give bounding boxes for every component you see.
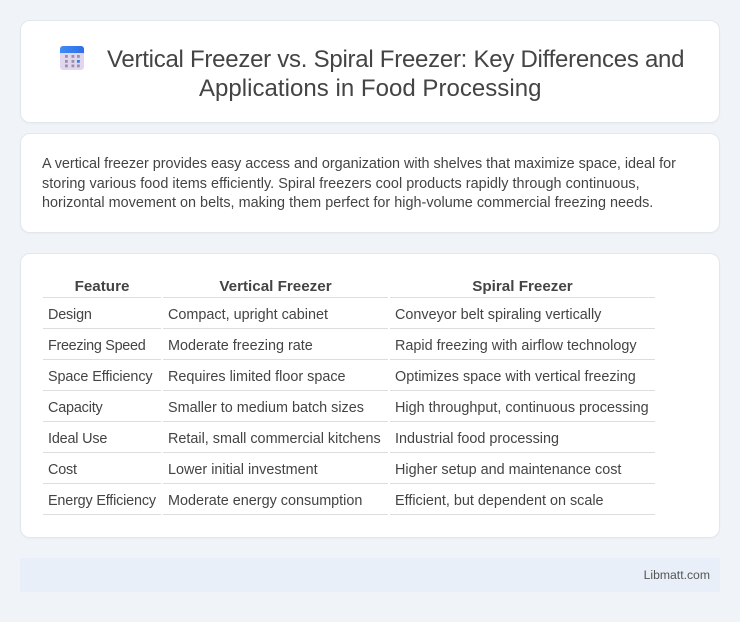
text: intro paragraph: A vertical freezer provides easy access and organization with shelves that maximize space, ideal for bbox=[42, 156, 676, 172]
table: feature comparison: Efficient, but dependent on scale bbox=[395, 493, 604, 509]
footer bbox=[20, 558, 720, 592]
panel: intro bbox=[20, 133, 720, 233]
table: feature comparison: Industrial food processing bbox=[395, 431, 559, 447]
table: feature comparison: Lower initial investment bbox=[168, 462, 318, 478]
table: feature comparison: Spiral Freezer bbox=[472, 278, 573, 295]
table: feature comparison: Conveyor belt spiraling vertically bbox=[395, 307, 601, 323]
icon: freezer calendar bbox=[60, 46, 84, 70]
table: feature comparison: Vertical Freezer bbox=[219, 278, 332, 295]
table: feature comparison: Smaller to medium batch sizes bbox=[168, 400, 364, 416]
table: feature comparison: Moderate energy consumption bbox=[168, 493, 362, 509]
table: feature comparison: Cost bbox=[48, 462, 77, 478]
footer: Libmatt.com bbox=[644, 568, 710, 582]
table: feature comparison: Energy Efficiency bbox=[48, 493, 156, 509]
table: feature comparison: Higher setup and maintenance cost bbox=[395, 462, 621, 478]
table: feature comparison: Space Efficiency bbox=[48, 369, 153, 385]
text: intro paragraph: horizontal movement on belts, making them perfect for high-volume commercial freezing needs. bbox=[42, 195, 653, 211]
table: feature comparison: Capacity bbox=[48, 400, 103, 416]
table: feature comparison: Moderate freezing rate bbox=[168, 338, 313, 354]
title bbox=[107, 46, 684, 102]
table: feature comparison: Requires limited floor space bbox=[168, 369, 346, 385]
table: feature comparison: High throughput, continuous processing bbox=[395, 400, 649, 416]
title: Vertical Freezer vs. Spiral Freezer: Key Differences and bbox=[107, 46, 684, 73]
table: feature comparison: Ideal Use bbox=[48, 431, 107, 447]
text: intro paragraph bbox=[42, 156, 676, 211]
panel: header bbox=[20, 20, 720, 123]
table: feature comparison bbox=[43, 278, 655, 515]
panel: comparison table bbox=[20, 253, 720, 538]
title: Applications in Food Processing bbox=[199, 75, 541, 102]
text: intro paragraph: storing various food items efficiently. Spiral freezers cool products rapidly through continuous, bbox=[42, 176, 640, 192]
table: feature comparison: Feature bbox=[75, 278, 129, 295]
table: feature comparison: Freezing Speed bbox=[48, 338, 145, 354]
table: feature comparison: Compact, upright cabinet bbox=[168, 307, 328, 323]
table: feature comparison: Retail, small commercial kitchens bbox=[168, 431, 381, 447]
table: feature comparison: Rapid freezing with airflow technology bbox=[395, 338, 637, 354]
table: feature comparison: Design bbox=[48, 307, 92, 323]
table: feature comparison: Optimizes space with vertical freezing bbox=[395, 369, 636, 385]
